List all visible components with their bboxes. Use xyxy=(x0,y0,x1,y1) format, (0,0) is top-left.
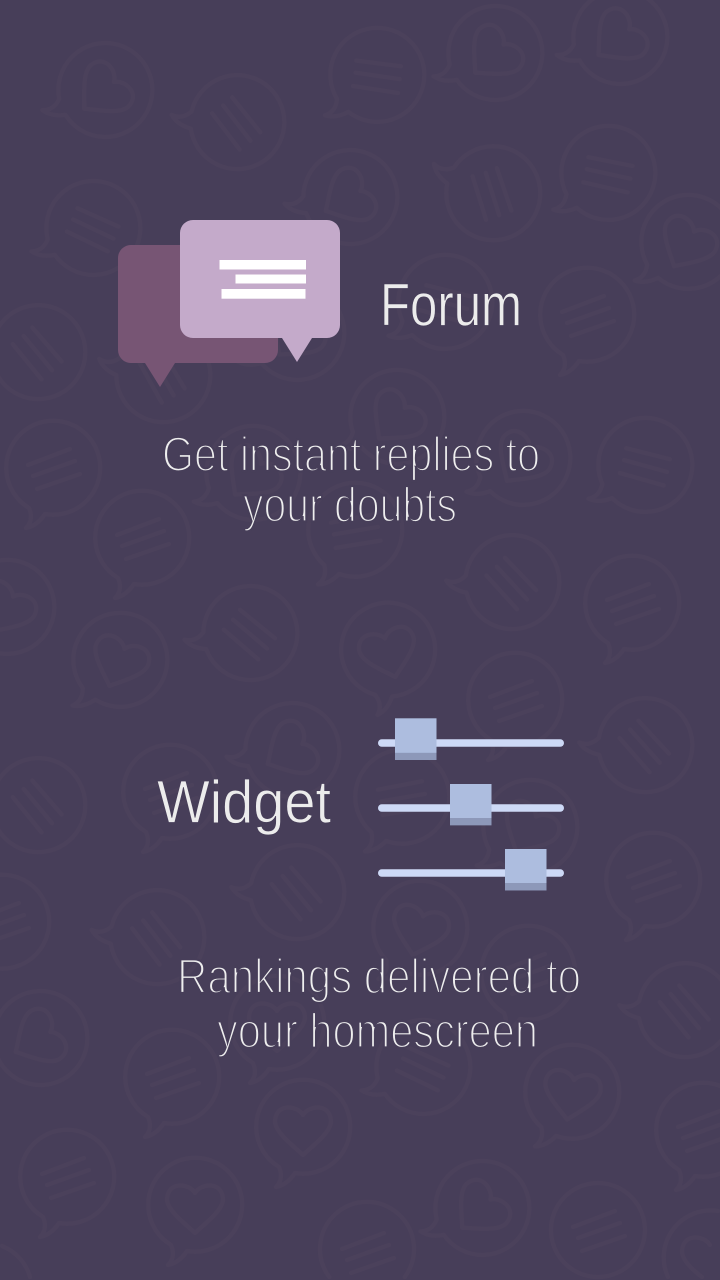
icon: dark back bubble xyxy=(118,245,278,387)
text: widget description: Rankings delivered to xyxy=(177,950,581,1004)
icon: message text bars xyxy=(220,260,306,299)
text: widget description xyxy=(177,950,581,1058)
text: forum description: your doubts xyxy=(243,478,457,532)
heading: Widget: Widget xyxy=(157,768,331,836)
slider 1 xyxy=(378,718,564,760)
slider 2 xyxy=(378,784,564,825)
heading: Forum: Forum xyxy=(380,272,522,338)
icon: light front bubble xyxy=(180,220,340,362)
slider 3 xyxy=(378,849,564,890)
icon: widget sliders xyxy=(378,718,564,890)
icon: forum speech bubbles xyxy=(118,220,340,387)
text: forum description xyxy=(162,428,540,532)
text: widget description: your homescreen xyxy=(217,1004,538,1058)
text: forum description: Get instant replies to xyxy=(162,428,540,482)
